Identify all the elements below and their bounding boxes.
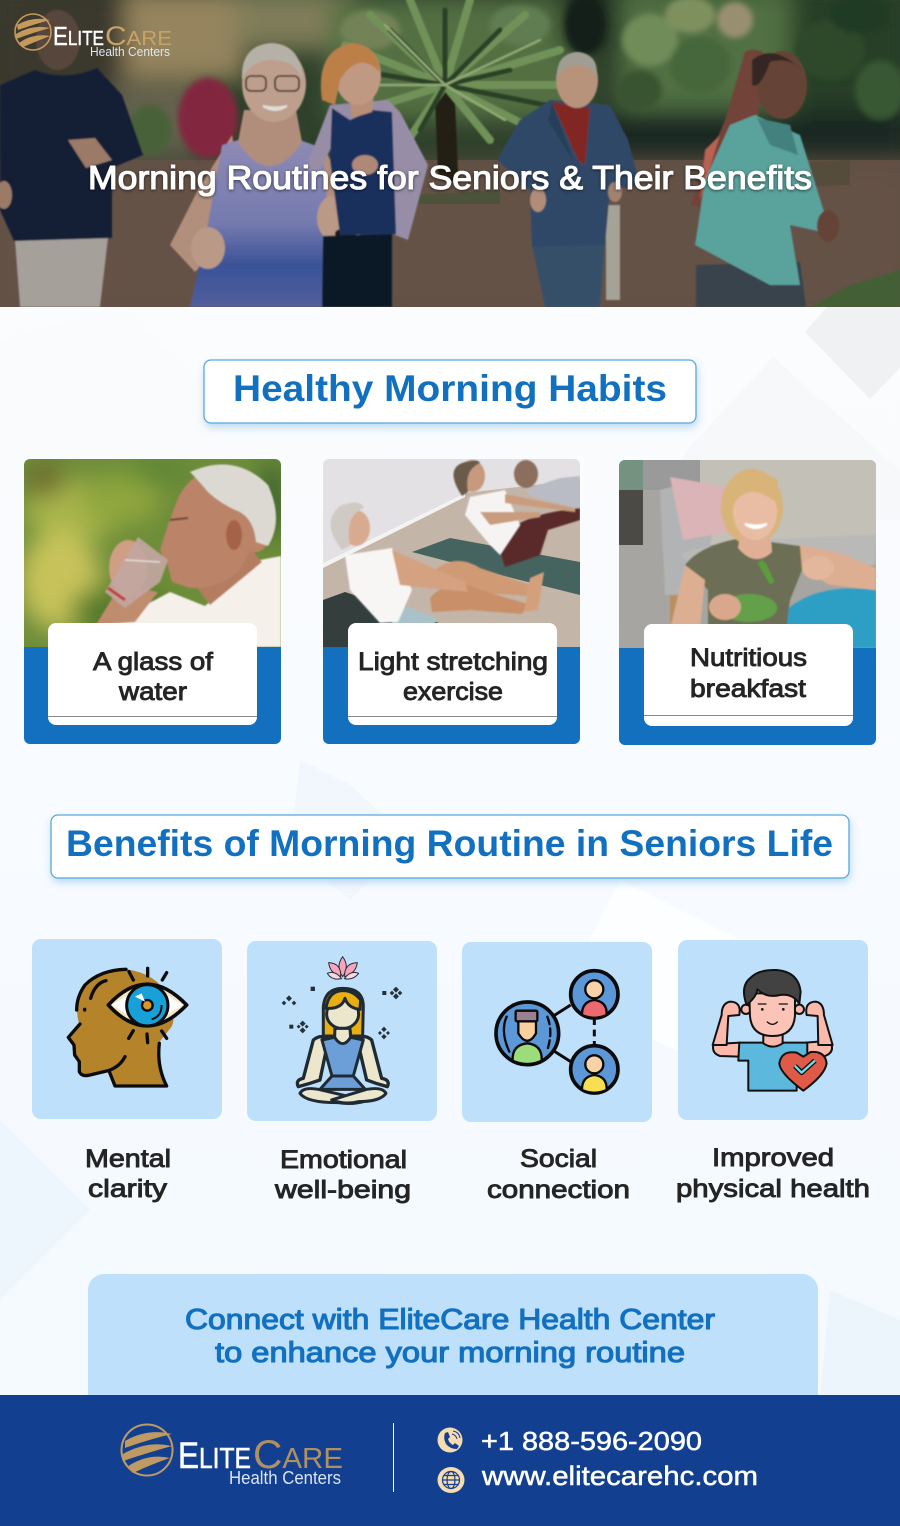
benefit: Social connection: Social (520, 1145, 597, 1173)
benefit: Emotional well-being: Emotional (280, 1146, 407, 1174)
label box (48, 623, 257, 725)
benefit: Improved physical health: Improved (712, 1144, 834, 1172)
back man (514, 460, 538, 488)
benefit: Social connection (462, 942, 652, 1204)
icon: strong man with heart (713, 970, 833, 1091)
jogger left (0, 10, 143, 307)
jogger with lavender cardigan (305, 43, 428, 307)
label box (644, 624, 853, 726)
icon: head with eye (68, 968, 187, 1086)
photo: seniors stretching on mats (323, 459, 580, 647)
label box: breakfast (690, 675, 806, 703)
benefit: Emotional well-being (247, 941, 437, 1204)
label box: Light stretching (358, 648, 548, 676)
heading: Benefits of Morning Routine in Seniors Life (51, 815, 849, 878)
heading: Benefits of Morning Routine in Seniors Life: Benefits of Morning Routine in Seniors Life (66, 823, 833, 864)
label box: A glass of (93, 648, 213, 676)
front woman (391, 606, 436, 623)
benefit: Improved physical health: physical health (676, 1175, 870, 1203)
footer (0, 1395, 900, 1526)
label box (348, 623, 557, 725)
benefit: Mental clarity: Mental (85, 1145, 171, 1173)
benefit: Social connection: connection (487, 1176, 630, 1204)
top logo: EliteCare Health Centers: Health Centers (90, 44, 170, 59)
label box: water (118, 678, 187, 706)
hero banner photo: seniors jogging (0, 0, 900, 315)
grass (810, 270, 900, 307)
footer logo: CARE (253, 1433, 343, 1477)
heading: Healthy Morning Habits (204, 360, 696, 423)
palm tree (345, 0, 570, 172)
benefit: Mental clarity (32, 939, 222, 1203)
habit card: Nutritious breakfast (619, 460, 876, 745)
divider (393, 1423, 394, 1492)
label box: exercise (403, 678, 503, 706)
icon: phone (438, 1428, 462, 1452)
call to action panel (88, 1274, 818, 1400)
habit card: Light stretching exercise (323, 459, 580, 744)
website: www.elitecarehc.com (481, 1461, 758, 1491)
top logo: EliteCare Health Centers: CARE (105, 21, 172, 51)
photo: senior man drinking water (20, 455, 286, 647)
photo: woman eating salad (619, 460, 876, 648)
label box: Nutritious (690, 644, 807, 672)
top logo: EliteCare Health Centers: ELITE (53, 21, 104, 51)
red flowering bush (128, 78, 238, 158)
call to action panel: Connect with EliteCare Health Center (185, 1304, 715, 1336)
benefit: Emotional well-being: well-being (274, 1176, 411, 1204)
benefit: Improved physical health (676, 940, 870, 1203)
footer logo (122, 1424, 343, 1488)
footer logo: Health Centers (229, 1468, 341, 1488)
icon: three connected people (496, 971, 618, 1093)
hero darkening overlay (0, 0, 900, 307)
jogger in blue jacket (497, 52, 640, 307)
title: Morning Routines for Seniors & Their Benefits (88, 160, 812, 197)
habit card: A glass of water (20, 455, 286, 744)
heading: Healthy Morning Habits: Healthy Morning Habits (233, 368, 667, 409)
jogger centre in glasses (170, 43, 366, 307)
foliage clusters (340, 0, 900, 120)
phone number: +1 888-596-2090 (481, 1426, 702, 1456)
call to action panel: to enhance your morning routine (215, 1337, 685, 1369)
icon: globe (438, 1467, 464, 1493)
benefit: Mental clarity: clarity (88, 1175, 168, 1203)
blurred park background (0, 0, 900, 315)
top logo: EliteCare Health Centers (15, 14, 172, 59)
back woman (498, 508, 580, 567)
jogger in teal jacket (690, 50, 839, 307)
footer logo: ELITE (178, 1435, 251, 1476)
icon: meditating woman with lotus (282, 957, 402, 1103)
